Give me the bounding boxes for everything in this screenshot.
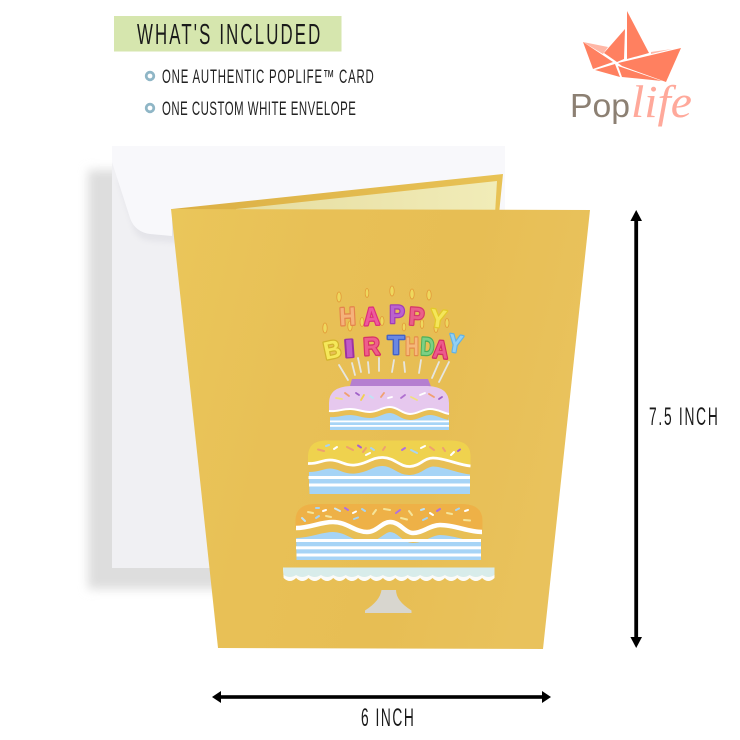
cake stand pedestal bbox=[365, 590, 412, 613]
wordmark: Pop bbox=[570, 87, 630, 124]
word: birthday: H bbox=[405, 332, 419, 361]
lettering: happy birthday bbox=[321, 301, 465, 366]
birthday candles bbox=[323, 286, 449, 382]
arrow: height bbox=[630, 210, 642, 648]
item: poplife card: ONE AUTHENTIC POPLIFE™ CARD bbox=[162, 67, 374, 88]
envelope flap bbox=[112, 146, 505, 236]
word: happy: A bbox=[363, 302, 380, 331]
flap shadow bbox=[118, 180, 180, 243]
word: birthday: D bbox=[420, 332, 435, 361]
envelope shadow bbox=[88, 170, 228, 589]
word: birthday: R bbox=[363, 333, 381, 362]
logo: poplife bbox=[570, 11, 692, 127]
word: happy bbox=[339, 301, 449, 334]
card back panel bbox=[172, 174, 503, 214]
cake: bottom tier bbox=[296, 504, 482, 560]
word: birthday: B bbox=[321, 335, 344, 366]
word: birthday: T bbox=[388, 331, 405, 360]
word: happy: P bbox=[389, 301, 405, 329]
card inner page bbox=[236, 181, 497, 214]
word: birthday: I bbox=[343, 334, 356, 363]
envelope body bbox=[112, 146, 505, 568]
cake: top tier bbox=[329, 379, 449, 430]
item: white envelope: ONE CUSTOM WHITE ENVELOPE bbox=[162, 99, 356, 120]
word: birthday: A bbox=[432, 335, 450, 364]
word: happy: Y bbox=[428, 305, 449, 334]
wordmark: life bbox=[631, 76, 692, 127]
candle sticks bbox=[339, 358, 449, 382]
word: birthday bbox=[321, 328, 465, 366]
icon: origami boat bbox=[583, 11, 681, 82]
card front bbox=[171, 209, 590, 649]
list: included items bbox=[146, 67, 374, 120]
wordmark bbox=[570, 76, 692, 127]
cake stand plate bbox=[283, 568, 494, 581]
candle flames bbox=[323, 286, 449, 333]
word: happy: H bbox=[339, 303, 356, 332]
label: width: 6 INCH bbox=[361, 705, 414, 732]
heading: what's included: WHAT'S INCLUDED bbox=[137, 20, 320, 51]
cake: middle tier bbox=[308, 440, 470, 494]
word: birthday: Y bbox=[446, 328, 465, 359]
arrow: width bbox=[212, 691, 551, 703]
envelope bbox=[88, 146, 505, 589]
word: happy: P bbox=[408, 303, 425, 332]
label: height: 7.5 INCH bbox=[649, 404, 718, 431]
cake top plate bbox=[349, 379, 432, 389]
card bbox=[171, 174, 590, 649]
